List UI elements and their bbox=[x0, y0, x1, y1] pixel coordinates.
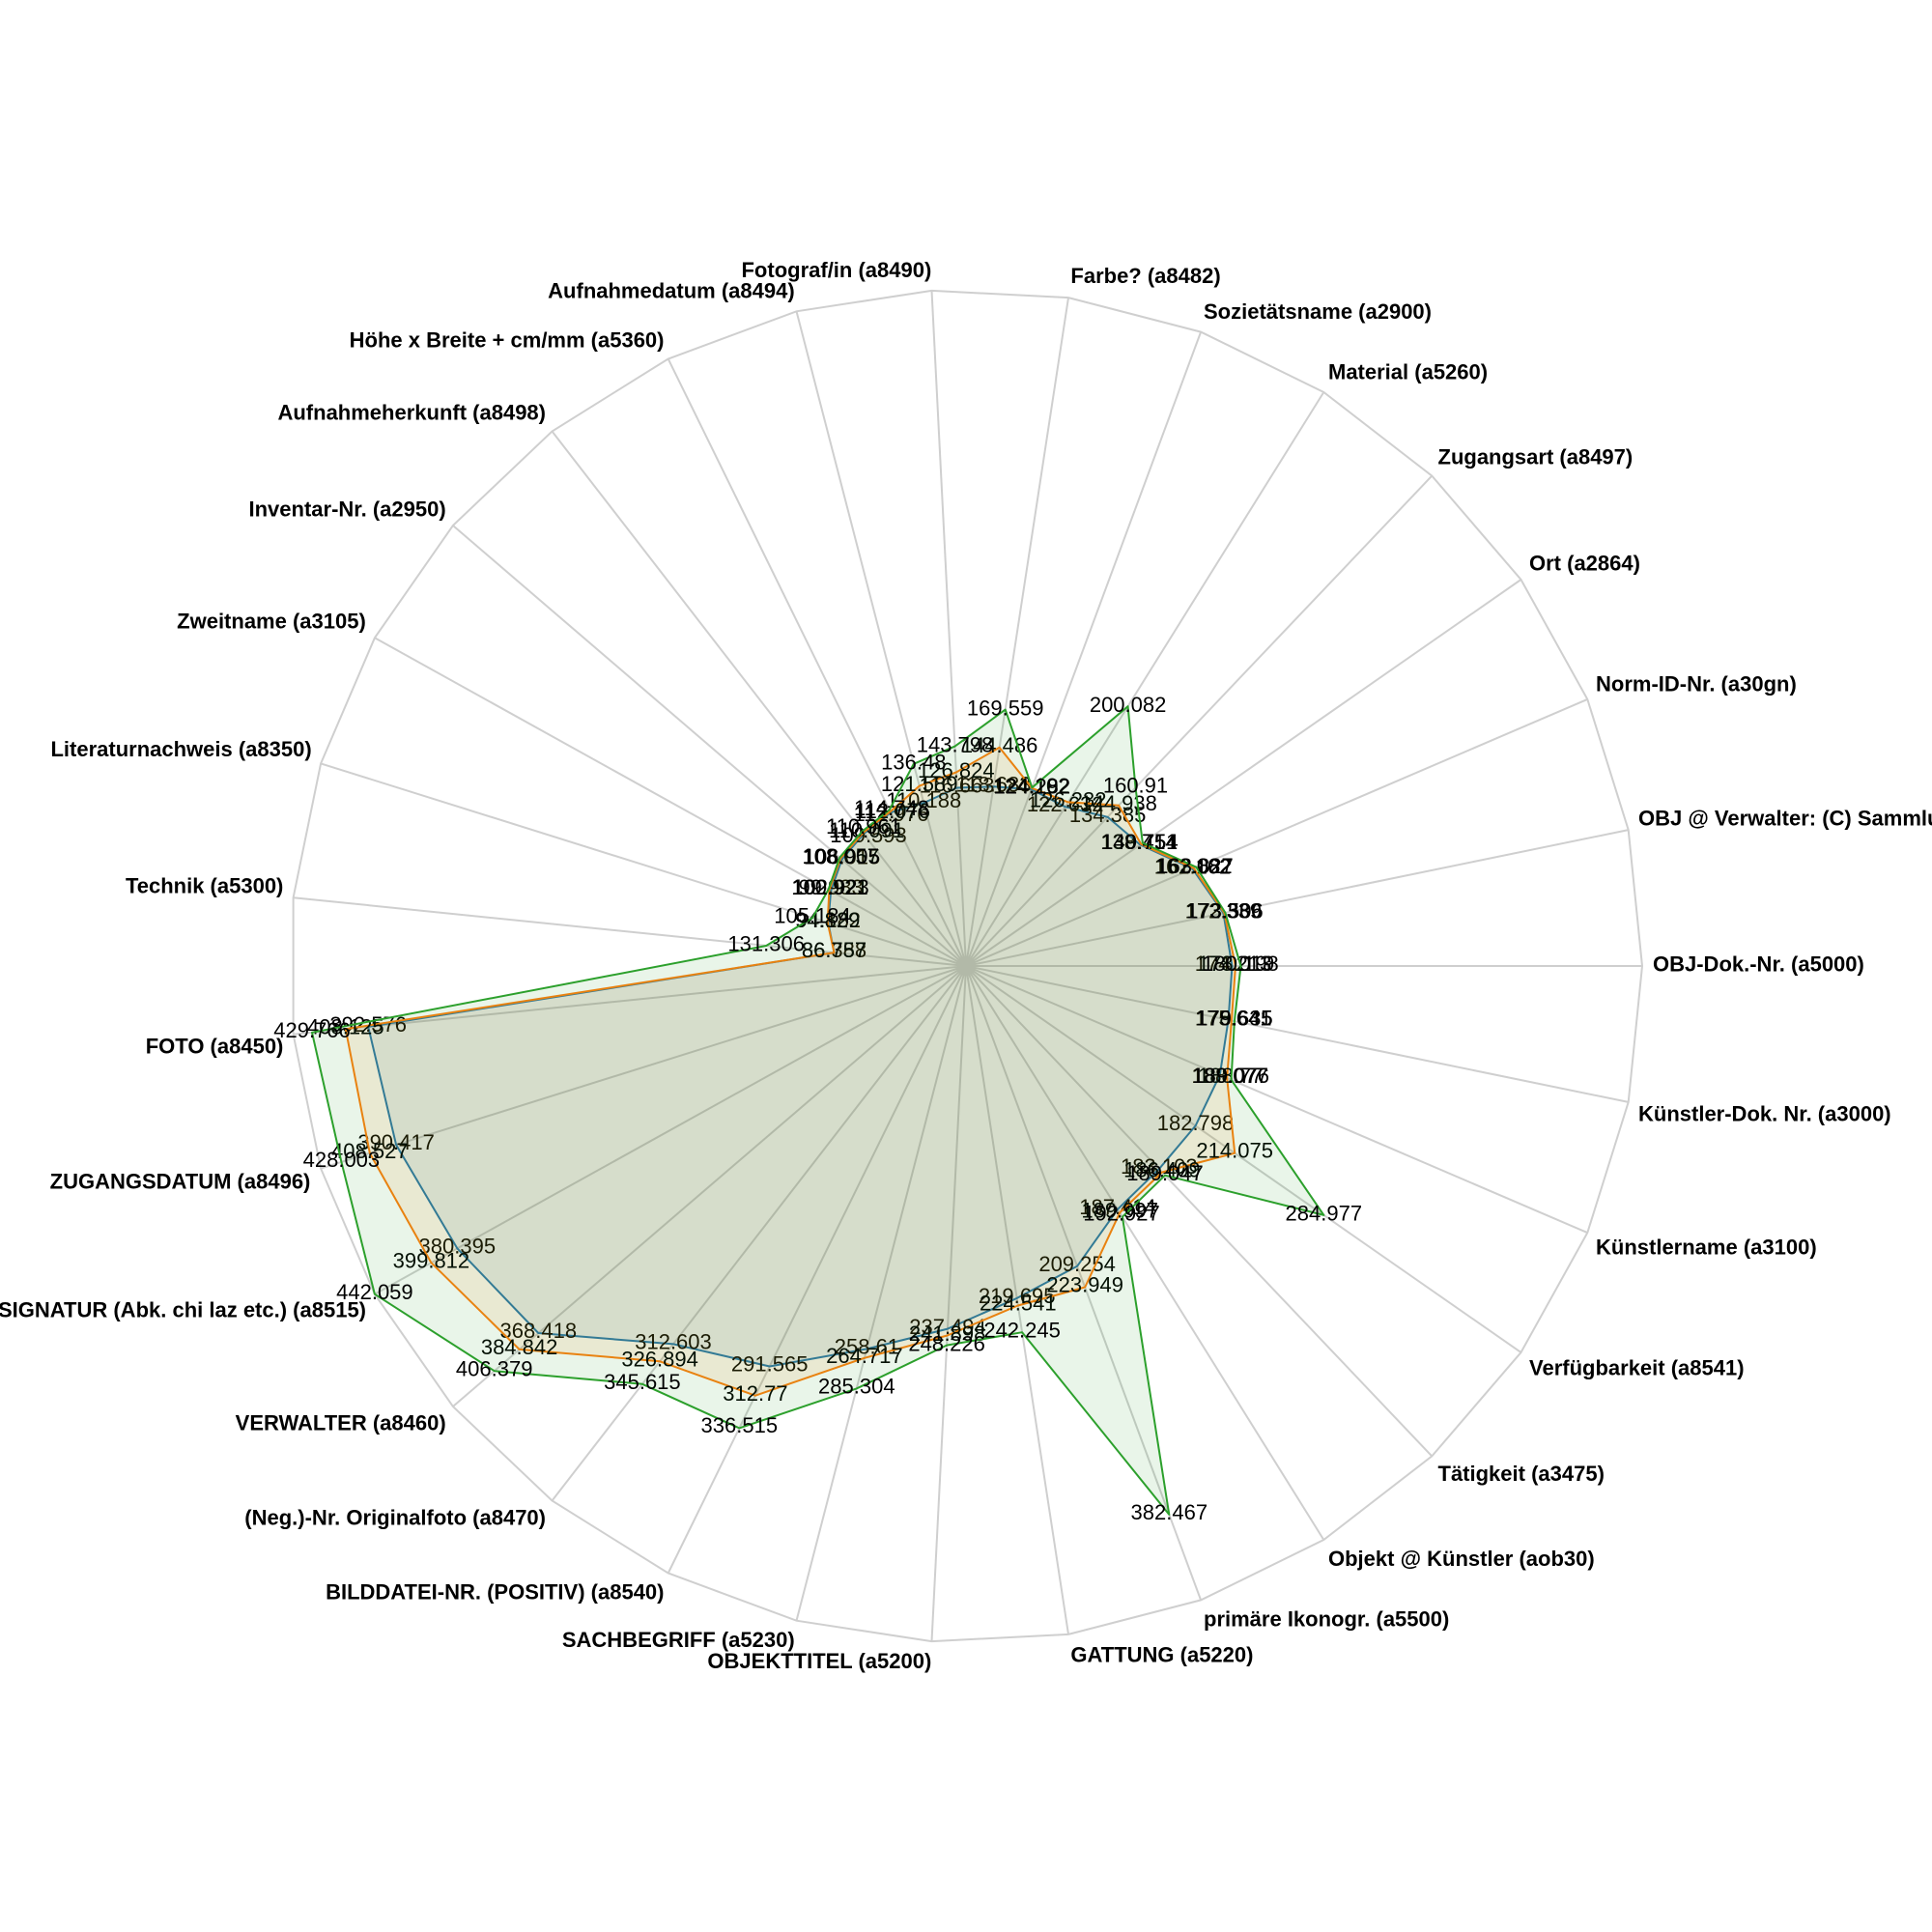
series 2: orange polygon and values: 173.386 bbox=[1186, 898, 1263, 923]
series 2: orange polygon and values: 121.589 bbox=[881, 772, 957, 796]
series 1: blue polygon and values: 312.603 bbox=[635, 1329, 712, 1354]
series 2: orange polygon and values: 124.192 bbox=[993, 775, 1070, 798]
series 2: orange polygon and values: 178.645 bbox=[1196, 1007, 1272, 1030]
series 2: orange polygon and values: 188.77 bbox=[1198, 1064, 1263, 1088]
series 3: green polygon and values: 179.635 bbox=[1196, 1007, 1273, 1030]
series 2: orange polygon and values: 126.232 bbox=[1030, 788, 1106, 811]
series 1: blue polygon and values: 112.976 bbox=[854, 802, 928, 826]
axis labels: Künstler-Dok. Nr. (a3000) bbox=[1638, 1101, 1891, 1126]
series 2: orange polygon and values: 223.949 bbox=[1046, 1273, 1123, 1296]
series 1: blue polygon and values: 138.714 bbox=[1100, 830, 1178, 854]
series 1: blue polygon and values: 368.418 bbox=[500, 1319, 577, 1343]
series 2: orange polygon and values: 399.812 bbox=[393, 1248, 469, 1273]
series 1: blue polygon and values: 187.414 bbox=[1079, 1195, 1156, 1219]
series 2: orange polygon and values: 186.409 bbox=[1123, 1157, 1201, 1182]
series 3: green polygon and values: 131.306 bbox=[727, 931, 805, 956]
series 2: orange polygon and values: 108.057 bbox=[802, 844, 879, 868]
series 1: blue polygon and values: 161.162 bbox=[1154, 854, 1231, 879]
series 3: green polygon and values: 102.923 bbox=[792, 875, 869, 899]
series 3: green polygon and values: 124.282 bbox=[994, 775, 1070, 798]
series 3: green polygon and values: 180.198 bbox=[1202, 952, 1279, 976]
series 3: green polygon and values: 189.076 bbox=[1192, 1064, 1269, 1088]
axis labels: Höhe x Breite + cm/mm (a5360) bbox=[350, 328, 665, 352]
radar grid: outer polygon and spokes bbox=[294, 291, 1642, 1641]
series 3: green polygon and values: 285.304 bbox=[818, 1374, 895, 1399]
series 1: blue polygon and values: 172.339 bbox=[1185, 898, 1262, 923]
series 1: blue polygon and values: 392.576 bbox=[329, 1012, 407, 1037]
axis labels: ZUGANGSDATUM (a8496) bbox=[50, 1169, 310, 1194]
series 1: blue polygon and values: 188.077 bbox=[1191, 1064, 1268, 1088]
series 2: orange polygon and values: 126.824 bbox=[918, 758, 995, 782]
series 3: green polygon and values: 110.961 bbox=[826, 814, 901, 838]
series 1: blue polygon and values: 109.593 bbox=[830, 823, 907, 847]
axis labels: Inventar-Nr. (a2950) bbox=[248, 497, 446, 522]
series 2: orange polygon and values: 224.541 bbox=[980, 1291, 1057, 1316]
series 2: orange polygon and values: 326.894 bbox=[621, 1347, 698, 1372]
series 3: green polygon and values: 140.754 bbox=[1101, 830, 1179, 854]
series 3: green polygon and values: 382.467 bbox=[1131, 1500, 1208, 1524]
axis labels: Zweitname (a3105) bbox=[177, 609, 366, 634]
axis labels: Aufnahmeherkunft (a8498) bbox=[277, 400, 546, 425]
series 2: orange polygon and values: 189.997 bbox=[1081, 1198, 1158, 1223]
series 1: blue polygon and values: 291.565 bbox=[731, 1352, 808, 1376]
series 1: blue polygon and values: 124.102 bbox=[993, 774, 1069, 798]
series 1: blue polygon and values: 183.103 bbox=[1121, 1154, 1198, 1179]
axis labels: OBJEKTTITEL (a5200) bbox=[707, 1649, 931, 1673]
series 1: blue polygon and values: 122.632 bbox=[1027, 792, 1103, 816]
series 2: orange polygon and values: 162.082 bbox=[1155, 854, 1233, 878]
series 1: blue polygon and values: 182.798 bbox=[1157, 1111, 1234, 1135]
series 1: blue polygon and values: 175.641 bbox=[1195, 1007, 1271, 1030]
series 3: green polygon and values: 143.798 bbox=[917, 732, 993, 757]
axis labels: Tätigkeit (a3475) bbox=[1437, 1462, 1605, 1486]
series 2: orange polygon and values: 384.842 bbox=[481, 1335, 557, 1359]
axis labels: GATTUNG (a5220) bbox=[1070, 1642, 1253, 1667]
series 1: blue polygon and values: 110.188 bbox=[886, 788, 961, 812]
series 2: orange polygon and values: 139.451 bbox=[1101, 830, 1178, 854]
series 3: green polygon and values: 429.766 bbox=[273, 1018, 351, 1042]
axis labels: Fotograf/in (a8490) bbox=[741, 258, 931, 282]
series 1: blue polygon and values: 94.182 bbox=[796, 908, 861, 932]
series 1: blue polygon and values: 237.494 bbox=[909, 1315, 986, 1339]
series 1: blue polygon and values: 174.213 bbox=[1195, 952, 1271, 976]
series 3: green polygon and values: 428.003 bbox=[303, 1148, 380, 1172]
axis labels: Aufnahmedatum (a8494) bbox=[548, 278, 795, 303]
axis labels: Literaturnachweis (a8350) bbox=[50, 737, 312, 761]
axis labels: (Neg.)-Nr. Originalfoto (a8470) bbox=[244, 1505, 546, 1530]
series 3: green polygon and values: 200.082 bbox=[1090, 693, 1166, 717]
series 3: green polygon and values: 108.905 bbox=[803, 844, 880, 868]
axis labels: Objekt @ Künstler (aob30) bbox=[1328, 1547, 1595, 1571]
series 3: green polygon and values: 242.245 bbox=[983, 1318, 1061, 1343]
series 2: orange polygon and values: 264.717 bbox=[826, 1344, 903, 1368]
series 3: green polygon and values: 192.927 bbox=[1083, 1201, 1160, 1225]
axis labels: Farbe? (a8482) bbox=[1070, 264, 1221, 288]
series 2: orange polygon and values: 408.527 bbox=[331, 1139, 409, 1163]
series 2: orange polygon and values: 144.938 bbox=[1080, 791, 1157, 815]
series 3: green polygon and values bbox=[273, 693, 1362, 1524]
series 1: blue polygon and values: 86.388 bbox=[802, 938, 867, 962]
series 1: blue polygon and values: 118.683 bbox=[956, 773, 1031, 796]
series 3: green polygon and values: 406.379 bbox=[456, 1356, 532, 1381]
series 3: green polygon and values: 189.047 bbox=[1126, 1161, 1204, 1185]
series 2: orange polygon and values: 86.757 bbox=[802, 938, 867, 962]
axis labels: VERWALTER (a8460) bbox=[236, 1410, 446, 1435]
series 2: orange polygon and values: 110.091 bbox=[829, 818, 904, 842]
axis labels: Ort (a2864) bbox=[1529, 551, 1640, 576]
axis labels: SIGNATUR (Abk. chi laz etc.) (a8515) bbox=[0, 1298, 366, 1321]
axis labels: OBJ-Dok.-Nr. (a5000) bbox=[1653, 952, 1864, 976]
series 3: green polygon and values: 173.506 bbox=[1186, 898, 1264, 923]
series 2: orange polygon and values bbox=[307, 733, 1274, 1406]
series 2: orange polygon and values: 214.075 bbox=[1196, 1139, 1273, 1163]
series 3: green polygon and values: 345.615 bbox=[604, 1370, 681, 1394]
axis labels: SACHBEGRIFF (a5230) bbox=[562, 1628, 795, 1652]
series 3: green polygon and values: 442.059 bbox=[336, 1280, 413, 1304]
series 2: orange polygon and values: 144.486 bbox=[961, 733, 1037, 757]
series 3: green polygon and values: 105.184 bbox=[774, 904, 851, 927]
axis labels bbox=[0, 258, 1932, 1673]
series 1: blue polygon and values: 116.663 bbox=[920, 773, 995, 798]
axis labels: Künstlername (a3100) bbox=[1596, 1235, 1817, 1260]
series 3: green polygon and values: 248.226 bbox=[908, 1332, 985, 1356]
axis labels: Material (a5260) bbox=[1328, 359, 1488, 384]
series 3: green polygon and values: 160.91 bbox=[1103, 773, 1168, 798]
series 1: blue polygon and values: 134.385 bbox=[1069, 803, 1146, 827]
series 2: orange polygon and values: 94.829 bbox=[795, 908, 860, 932]
axis labels: Sozietätsname (a2900) bbox=[1204, 299, 1432, 324]
series 2: orange polygon and values: 100.921 bbox=[791, 875, 868, 899]
series 2: orange polygon and values: 112.076 bbox=[855, 799, 930, 823]
series 3: green polygon and values: 169.559 bbox=[967, 696, 1043, 721]
series 2: orange polygon and values: 241.898 bbox=[909, 1321, 985, 1346]
series 1: blue polygon and values: 219.695 bbox=[979, 1284, 1055, 1308]
series 2: orange polygon and values: 312.77 bbox=[723, 1381, 788, 1406]
series 1: blue polygon and values: 99.983 bbox=[798, 875, 864, 899]
series 1: blue polygon and values: 106.015 bbox=[804, 844, 880, 869]
series 1: blue polygon and values: 380.395 bbox=[419, 1235, 496, 1258]
axis labels: Norm-ID-Nr. (a30gn) bbox=[1596, 672, 1797, 696]
series 2: orange polygon and values: 408.125 bbox=[307, 1014, 384, 1039]
axis labels: Verfügbarkeit (a8541) bbox=[1529, 1356, 1745, 1379]
axis labels: primäre Ikonogr. (a5500) bbox=[1204, 1607, 1449, 1631]
axis labels: FOTO (a8450) bbox=[146, 1034, 283, 1059]
axis labels: BILDDATEI-NR. (POSITIV) (a8540) bbox=[326, 1580, 665, 1604]
series 3: green polygon and values: 136.48 bbox=[881, 750, 946, 775]
series 3: green polygon and values: 336.515 bbox=[701, 1413, 778, 1437]
series 1: blue polygon and values bbox=[329, 773, 1271, 1376]
series 2: orange polygon and values: 178.019 bbox=[1198, 952, 1274, 976]
axis labels: Technik (a5300) bbox=[126, 873, 283, 898]
series 1: blue polygon and values: 258.61 bbox=[835, 1335, 899, 1358]
axis labels: Zugangsart (a8497) bbox=[1437, 444, 1633, 469]
series 3: green polygon and values: 163.827 bbox=[1156, 854, 1234, 878]
series 1: blue polygon and values: 390.417 bbox=[357, 1130, 435, 1154]
series 1: blue polygon and values: 209.254 bbox=[1038, 1252, 1116, 1276]
series 3: green polygon and values: 114.748 bbox=[854, 796, 929, 820]
series 3: green polygon and values: 284.977 bbox=[1286, 1201, 1362, 1225]
